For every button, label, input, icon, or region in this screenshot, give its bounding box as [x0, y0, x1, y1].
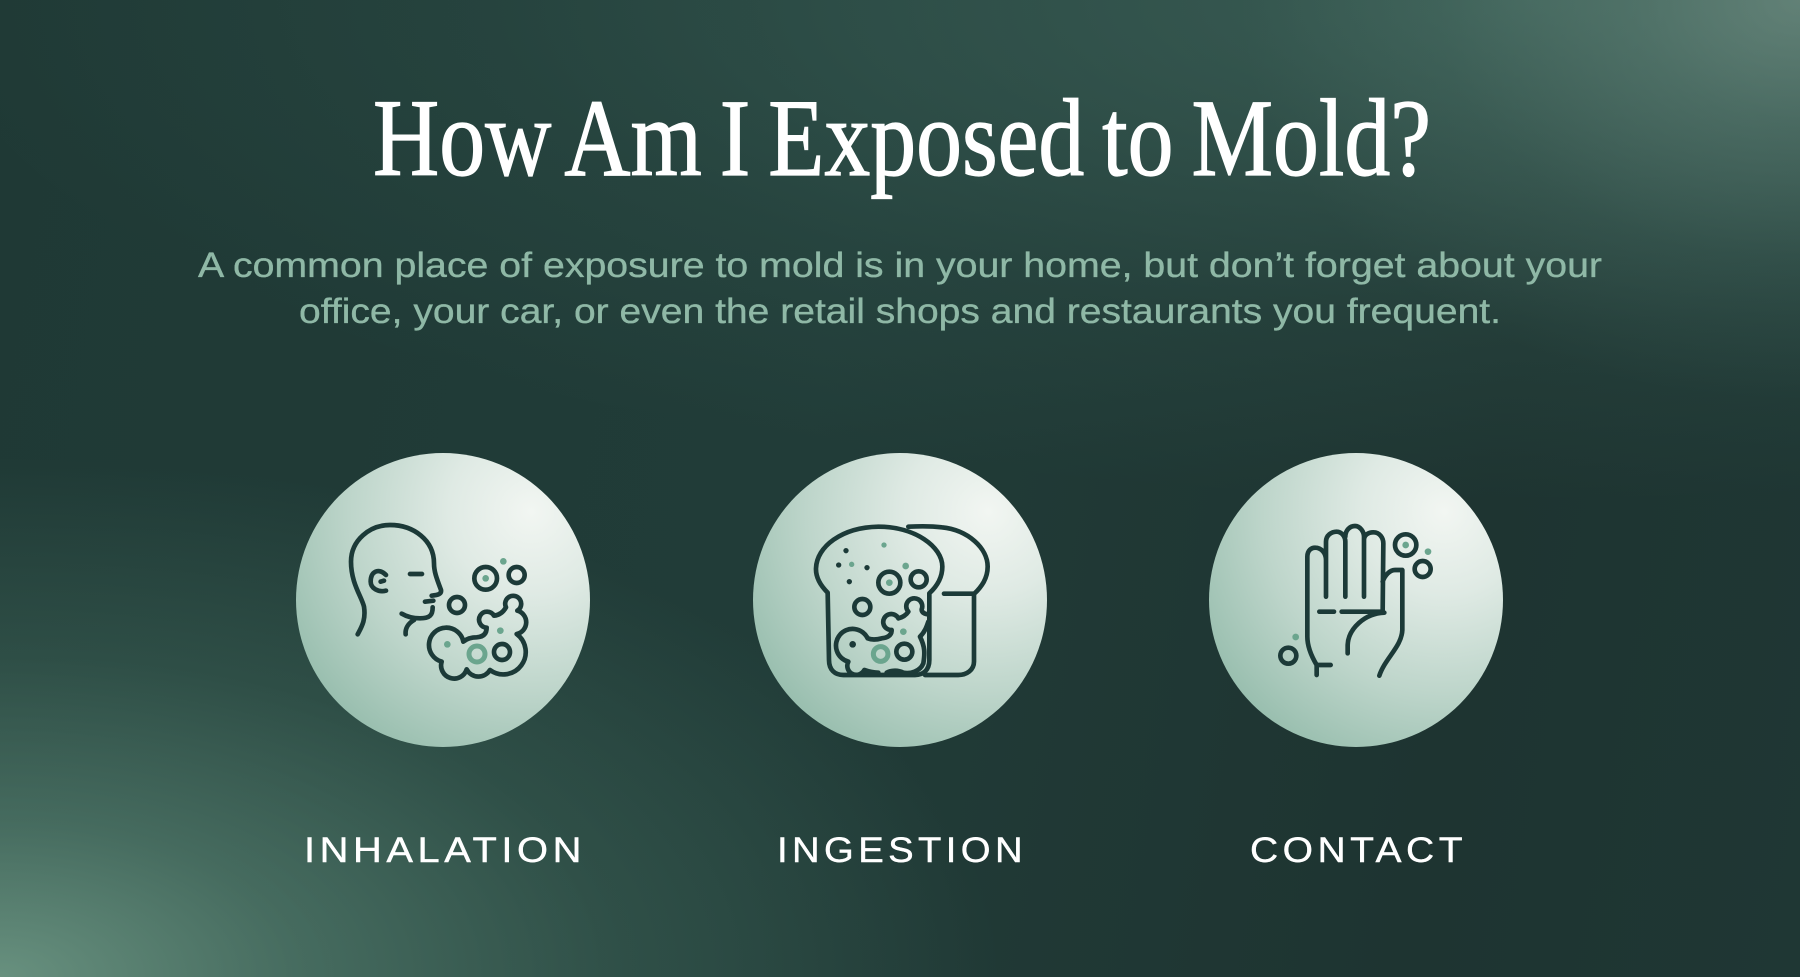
- subtitle text: office, your car, or even the retail shops and restaurants you frequent.: [299, 292, 1501, 331]
- title: How Am I Exposed to Mold?: [373, 77, 1431, 199]
- icon: person inhaling mold spores: [351, 525, 526, 679]
- label: ingestion: INGESTION: [777, 831, 1027, 870]
- label: contact: CONTACT: [1250, 831, 1467, 870]
- label: inhalation: INHALATION: [304, 831, 586, 870]
- icon: moldy bread: [816, 526, 988, 675]
- circle: contact: [1209, 453, 1503, 747]
- subtitle text: [198, 246, 1602, 331]
- subtitle text: A common place of exposure to mold is in your home, but don’t forget about your: [198, 246, 1602, 285]
- icon: hand with mold spores: [1280, 526, 1431, 676]
- circle: inhalation: [296, 453, 590, 747]
- circle: ingestion: [753, 453, 1047, 747]
